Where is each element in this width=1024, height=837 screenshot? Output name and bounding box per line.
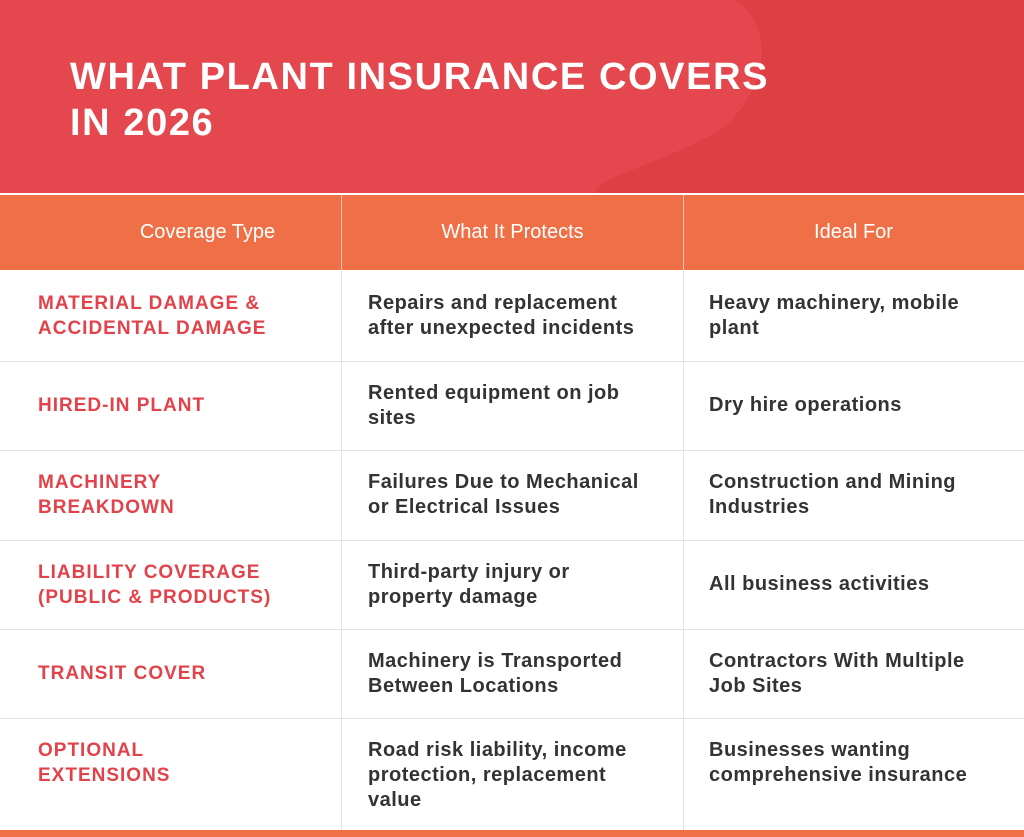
row: liability: All business activities xyxy=(709,573,929,595)
title: WHAT PLANT INSURANCE COVERS xyxy=(70,56,769,98)
row: machinery breakdown: Industries xyxy=(709,496,810,518)
row: machinery breakdown: MACHINERY xyxy=(38,472,161,493)
row: machinery breakdown: or Electrical Issues xyxy=(368,496,560,518)
row: transit: TRANSIT COVER xyxy=(38,663,206,684)
table header xyxy=(0,195,1024,270)
row: material damage: Heavy machinery, mobile xyxy=(709,292,959,314)
row: optional extensions: EXTENSIONS xyxy=(38,765,170,786)
title: IN 2026 xyxy=(70,102,214,144)
row: material damage: Repairs and replacement xyxy=(368,292,617,314)
row: machinery breakdown xyxy=(38,471,956,518)
row: transit: Machinery is Transported xyxy=(368,650,622,672)
row: material damage: ACCIDENTAL DAMAGE xyxy=(38,318,266,338)
row: machinery breakdown: BREAKDOWN xyxy=(38,497,175,518)
bottom bar xyxy=(0,830,1024,837)
row: transit xyxy=(38,650,965,696)
row: transit: Between Locations xyxy=(368,674,559,696)
row: liability: property damage xyxy=(368,586,538,608)
row: optional extensions: Road risk liability, income xyxy=(368,739,627,761)
row: material damage xyxy=(38,292,959,338)
row: machinery breakdown: Construction and Mining xyxy=(709,471,956,493)
row: material damage: plant xyxy=(709,316,759,338)
title xyxy=(70,56,769,144)
row: hired-in plant xyxy=(38,382,902,428)
header banner xyxy=(0,0,1024,193)
row: machinery breakdown: Failures Due to Mechanical xyxy=(368,471,639,493)
row: liability: LIABILITY COVERAGE xyxy=(38,562,260,582)
row: transit: Job Sites xyxy=(709,674,802,696)
row: material damage: after unexpected incidents xyxy=(368,316,634,338)
row: liability: (PUBLIC & PRODUCTS) xyxy=(38,586,271,608)
row: material damage: MATERIAL DAMAGE & xyxy=(38,292,260,314)
row: hired-in plant: Dry hire operations xyxy=(709,394,902,416)
row: hired-in plant: Rented equipment on job xyxy=(368,382,620,404)
row: optional extensions: protection, replacement xyxy=(368,764,606,786)
table header: What It Protects xyxy=(441,221,584,243)
row: liability xyxy=(38,560,929,608)
row: optional extensions: value xyxy=(368,789,422,811)
table header: Coverage Type xyxy=(140,221,275,243)
row: optional extensions: OPTIONAL xyxy=(38,740,144,761)
row: optional extensions xyxy=(38,739,967,811)
table header: Ideal For xyxy=(814,221,893,243)
row: hired-in plant: sites xyxy=(368,406,416,428)
row: liability: Third-party injury or xyxy=(368,560,570,582)
row: optional extensions: Businesses wanting xyxy=(709,739,910,761)
row: transit: Contractors With Multiple xyxy=(709,650,965,672)
row: hired-in plant: HIRED-IN PLANT xyxy=(38,395,205,416)
row: optional extensions: comprehensive insurance xyxy=(709,764,967,786)
